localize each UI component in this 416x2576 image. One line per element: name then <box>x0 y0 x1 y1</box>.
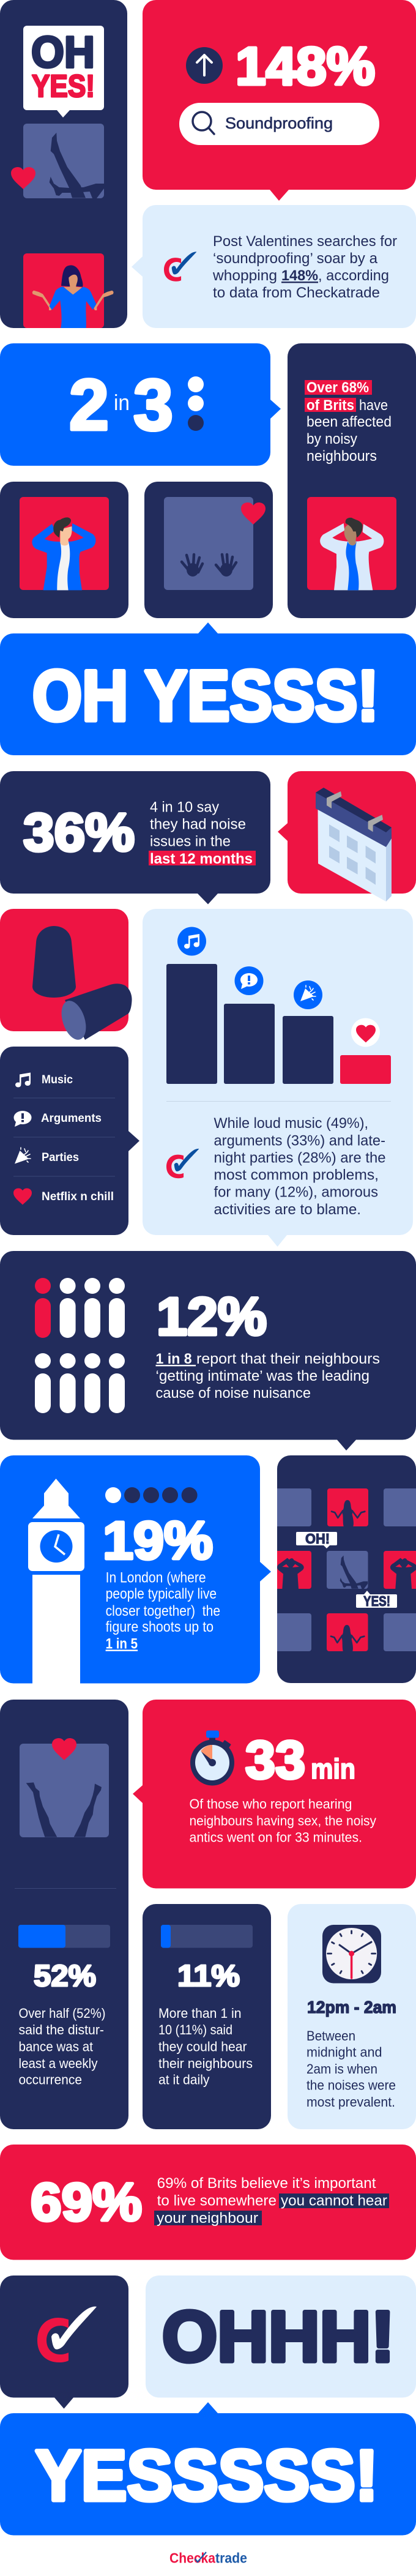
legend: music: Music <box>42 1073 73 1086</box>
text: getting intimate: ‘getting intimate’ was the leading <box>155 1368 370 1384</box>
text: weekly copy: bance was at <box>18 2039 94 2054</box>
text: daily copy: 10 (11%) said <box>158 2022 232 2037</box>
panel: 68 percent of Brits <box>288 343 416 618</box>
text: midnight copy: the noises were <box>306 2077 396 2093</box>
speech tag: yes <box>356 1591 397 1609</box>
banner: oh yesss <box>0 622 416 755</box>
icon: stopwatch <box>190 1731 234 1786</box>
text: searches copy: whopping <box>212 267 277 284</box>
icon: up arrow <box>186 47 223 84</box>
text: duration copy <box>190 1796 377 1845</box>
icon: standing earplug <box>32 926 76 998</box>
text: daily copy: their neighbours <box>158 2056 253 2071</box>
stat: 52%: 52% <box>34 1960 96 1993</box>
stat: 33 min <box>245 1731 355 1790</box>
text: daily copy: they could hear <box>158 2039 247 2054</box>
text: 69 percent copy <box>154 2175 389 2227</box>
text: midnight copy: midnight and <box>306 2044 382 2060</box>
text: noise issues: 4 in 10 say <box>150 799 219 815</box>
window: man holding head <box>307 497 396 590</box>
progress bar: 11% <box>161 1925 253 1948</box>
icon: parties circle <box>294 980 322 1009</box>
stat: 33 min: 33 <box>245 1731 305 1790</box>
text: Brits copy: have <box>359 397 388 414</box>
panel: time of night <box>288 1904 416 2129</box>
banner: yessssss <box>0 2402 416 2535</box>
text: noise issues: issues in the <box>150 834 231 849</box>
text: causes copy: most common problems, <box>214 1167 379 1184</box>
silhouette: woman bottom <box>331 1625 364 1651</box>
window: woman shrugging <box>23 253 114 328</box>
icon: heart <box>11 167 35 189</box>
banner: yessssss: YESSSSS! <box>35 2435 378 2515</box>
text: 69 percent copy: 69% of Brits believe it’s important <box>157 2175 376 2192</box>
icon: music circle <box>177 927 206 956</box>
text: getting intimate: 1 in 8 <box>155 1351 196 1367</box>
panel: calendar <box>278 771 416 902</box>
legend: netflix n chill <box>13 1189 114 1204</box>
legend: arguments <box>13 1111 102 1127</box>
text: weekly copy: Over half (52%) <box>18 2006 105 2021</box>
silhouette: man right <box>390 1558 416 1589</box>
stat: 19%: 19% <box>103 1511 213 1570</box>
text: searches copy: , according <box>318 267 389 284</box>
legend: parties: Parties <box>42 1151 79 1164</box>
stat: 11%: 11% <box>177 1960 240 1993</box>
panel: 11 percent stat <box>143 1904 271 2129</box>
panel: ohhh <box>146 2275 416 2398</box>
speech bubble: oh yes: OH <box>31 28 95 77</box>
panel: London 19 percent <box>0 1455 271 1683</box>
progress bar: 52% <box>18 1925 110 1948</box>
banner: oh yesss: OH YESSS! <box>32 655 379 736</box>
icon: clock <box>322 1925 381 1983</box>
search box <box>179 103 379 145</box>
text: London copy: people typically live <box>106 1586 217 1602</box>
panel: 2 in 3 stat <box>0 343 281 466</box>
text: daily copy <box>158 2006 253 2087</box>
text: causes copy: While loud music (49%), <box>214 1115 368 1132</box>
panel: noise causes chart <box>143 909 413 1247</box>
text: duration copy: antics went on for 33 minutes. <box>190 1830 362 1845</box>
icon: big ben <box>28 1479 84 1683</box>
panel: 148 percent stat <box>143 0 416 201</box>
text: midnight copy <box>306 2028 396 2110</box>
speech bubble: oh yes: YES! <box>32 69 95 103</box>
text: 69 percent copy: you cannot hear <box>281 2192 387 2209</box>
text: Brits copy: been affected <box>306 414 392 430</box>
panel: hands on window <box>144 482 273 618</box>
legend: parties <box>15 1148 79 1164</box>
panel: soundproofing searches text <box>132 205 416 328</box>
icon: check mark logo <box>37 2307 97 2362</box>
legend: music <box>15 1072 73 1087</box>
speech tag: yes: YES! <box>363 1593 390 1609</box>
text: daily copy: More than 1 in <box>158 2006 241 2021</box>
text: duration copy: Of those who report hearing <box>190 1796 352 1812</box>
logo: checkatrade: Checka <box>169 2550 215 2566</box>
bar chart <box>166 964 391 1084</box>
text: searches copy: ‘soundproofing’ soar by a <box>213 250 378 267</box>
text: searches copy <box>212 233 397 301</box>
text: causes copy: activities are to blame. <box>214 1201 361 1218</box>
text: Brits copy: Over 68% <box>306 379 369 396</box>
speech bubble: oh yes <box>23 26 104 118</box>
text: weekly copy: occurrence <box>18 2072 82 2087</box>
stat: 2 in 3: 3 <box>133 365 173 446</box>
stat: 2 in 3 <box>69 365 173 446</box>
stat: 12%: 12% <box>157 1287 267 1346</box>
panel: ohhh: OHHH! <box>162 2296 395 2376</box>
text: London copy: closer together) the <box>106 1603 220 1619</box>
text: 69 percent copy: your neighbour <box>157 2210 258 2227</box>
text: causes copy: arguments (33%) and late- <box>214 1132 385 1149</box>
icon: heart <box>52 1738 76 1760</box>
text: weekly copy <box>18 2006 105 2087</box>
silhouette: woman top <box>332 1500 365 1526</box>
silhouette: man left <box>277 1558 304 1589</box>
panel: 36 percent stat <box>0 771 270 905</box>
stat: 33 min: min <box>311 1753 355 1785</box>
text: noise issues: they had noise <box>150 816 246 832</box>
text: getting intimate: cause of noise nuisance <box>155 1385 311 1402</box>
panel: apartment block windows <box>269 1455 416 1683</box>
legend: arguments: Arguments <box>41 1112 102 1125</box>
text: searches copy: 148% <box>281 267 318 284</box>
window: legs silhouette <box>23 124 104 198</box>
text: London copy: In London (where <box>106 1569 206 1586</box>
panel: man with hands on head <box>0 482 128 618</box>
logo: checkatrade: trade <box>215 2550 247 2566</box>
logo: checkatrade <box>169 2550 247 2566</box>
text: midnight copy: 2am is when <box>306 2061 377 2077</box>
text: 69 percent copy: to live somewhere <box>157 2192 277 2209</box>
window: legs in the air <box>20 1744 109 1837</box>
panel: 33 minutes stat <box>133 1700 416 1889</box>
silhouette: legs <box>340 1555 368 1589</box>
text: weekly copy: said the distur- <box>18 2022 104 2037</box>
panel: checkatrade mark <box>0 2275 128 2409</box>
text: getting intimate <box>155 1351 380 1402</box>
panel: frequency stat column <box>0 1700 128 2129</box>
stat: 12pm - 2am: 12pm - 2am <box>307 1998 396 2017</box>
panel: 12 percent stat <box>0 1251 416 1450</box>
text: London copy: 1 in 5 <box>106 1635 138 1652</box>
text: weekly copy: least a weekly <box>18 2056 98 2071</box>
icon: checkatrade mark <box>164 252 196 282</box>
pictogram: 1 in 5 dots <box>105 1487 198 1503</box>
window grid <box>269 1488 416 1651</box>
icon: heart circle <box>351 1018 380 1047</box>
stat: 36%: 36% <box>23 803 135 862</box>
legend: netflix n chill: Netflix n chill <box>42 1190 114 1203</box>
text: searches copy: Post Valentines searches for <box>213 233 397 250</box>
text: causes copy: night parties (28%) are the <box>214 1149 385 1167</box>
icon: arguments circle <box>235 966 263 995</box>
text: Brits copy <box>305 379 392 465</box>
text: causes copy: for many (12%), amorous <box>214 1184 378 1201</box>
text: midnight copy: Between <box>306 2028 355 2044</box>
speech tag: oh: OH! <box>305 1531 330 1547</box>
icon: calendar <box>316 788 392 902</box>
speech tag: oh <box>296 1531 337 1548</box>
icon: checkatrade mark <box>166 1149 199 1178</box>
text: searches copy: to data from Checkatrade <box>213 285 380 301</box>
text: daily copy: at it daily <box>158 2072 210 2087</box>
panel: legend <box>0 1047 139 1235</box>
icon: heart <box>241 502 266 525</box>
text: noise issues: last 12 months <box>150 851 253 867</box>
text: London copy <box>106 1569 220 1652</box>
text: getting intimate: report that their neighbours <box>196 1351 380 1367</box>
panel: 69 percent stat <box>0 2145 416 2260</box>
panel: oh yes illustrations <box>0 0 127 328</box>
icon: three dots <box>188 376 204 431</box>
stat: 69%: 69% <box>31 2173 142 2232</box>
text: Brits copy: of Brits <box>306 397 354 414</box>
pictogram: 1 in 8 people <box>35 1278 125 1413</box>
text: causes copy <box>214 1115 385 1218</box>
text: Brits copy: neighbours <box>306 448 377 465</box>
stat: 2 in 3: 2 <box>69 365 109 446</box>
text: London copy: figure shoots up to <box>106 1619 214 1635</box>
icon: lying earplug <box>57 984 132 1043</box>
stat: 148%: 148% <box>236 37 375 96</box>
icon: hand prints <box>182 554 236 577</box>
search box: Soundproofing <box>225 114 333 132</box>
panel: earplugs <box>0 909 132 1043</box>
text: duration copy: neighbours having sex, the noisy <box>190 1813 377 1829</box>
text: midnight copy: most prevalent. <box>306 2094 395 2110</box>
text: Brits copy: by noisy <box>306 431 357 447</box>
text: noise issues <box>149 799 256 867</box>
stat: 2 in 3: in <box>114 390 130 415</box>
